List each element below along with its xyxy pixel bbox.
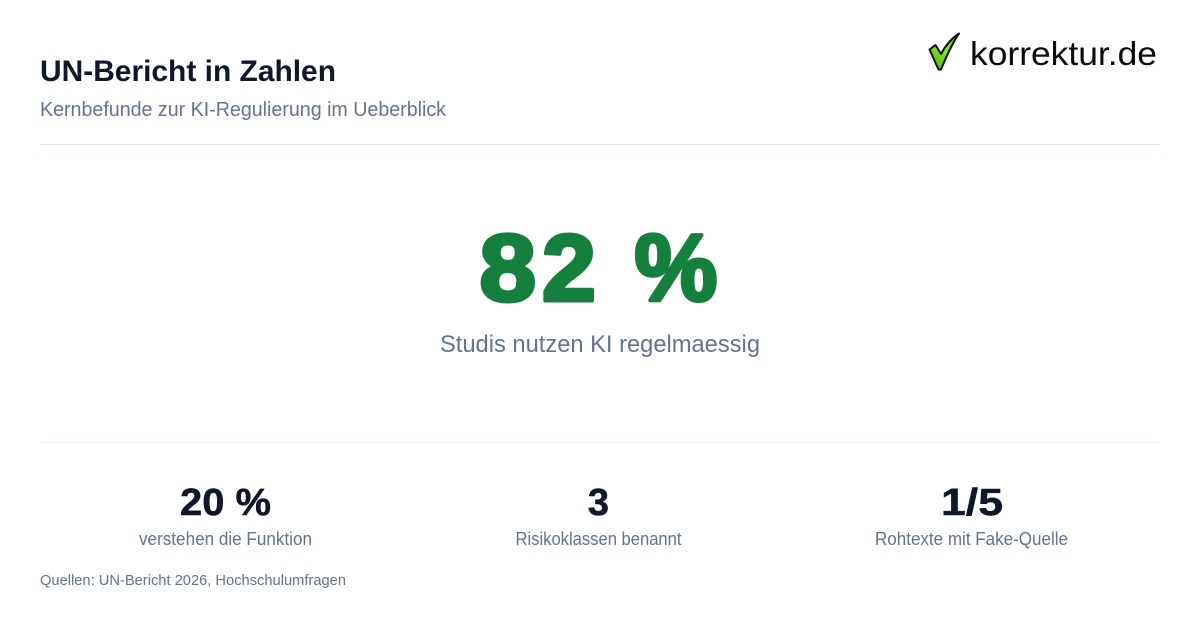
logo wordmark: korrektur.de bbox=[970, 35, 1157, 72]
hero number bbox=[480, 215, 717, 321]
hero number: % bbox=[634, 215, 717, 321]
source note: Quellen: UN-Bericht 2026, Hochschulumfragen bbox=[40, 572, 346, 589]
hero statistic bbox=[440, 215, 760, 358]
subtitle: Kernbefunde zur KI-Regulierung im Ueberblick bbox=[40, 99, 447, 121]
stat: 3: 3 bbox=[588, 482, 609, 524]
stat: 3 bbox=[516, 482, 682, 549]
hero number: 8 bbox=[480, 215, 536, 321]
stat: 1/5: 1/5 bbox=[941, 482, 1003, 524]
stat: 3: Risikoklassen benannt bbox=[516, 529, 682, 549]
hero label: Studis nutzen KI regelmaessig bbox=[440, 331, 760, 358]
logo bbox=[930, 34, 1157, 72]
stat: 1/5 bbox=[875, 482, 1068, 549]
title: UN-Bericht in Zahlen bbox=[40, 55, 336, 88]
hero number: 2 bbox=[542, 215, 596, 321]
icon: check mark bbox=[930, 34, 959, 70]
stat: 20 %: 20 % bbox=[180, 482, 271, 524]
stat: 20 % bbox=[139, 482, 312, 549]
stat: 1/5: Rohtexte mit Fake-Quelle bbox=[875, 529, 1068, 549]
header bbox=[40, 55, 447, 121]
stat: 20 %: verstehen die Funktion bbox=[139, 529, 312, 549]
